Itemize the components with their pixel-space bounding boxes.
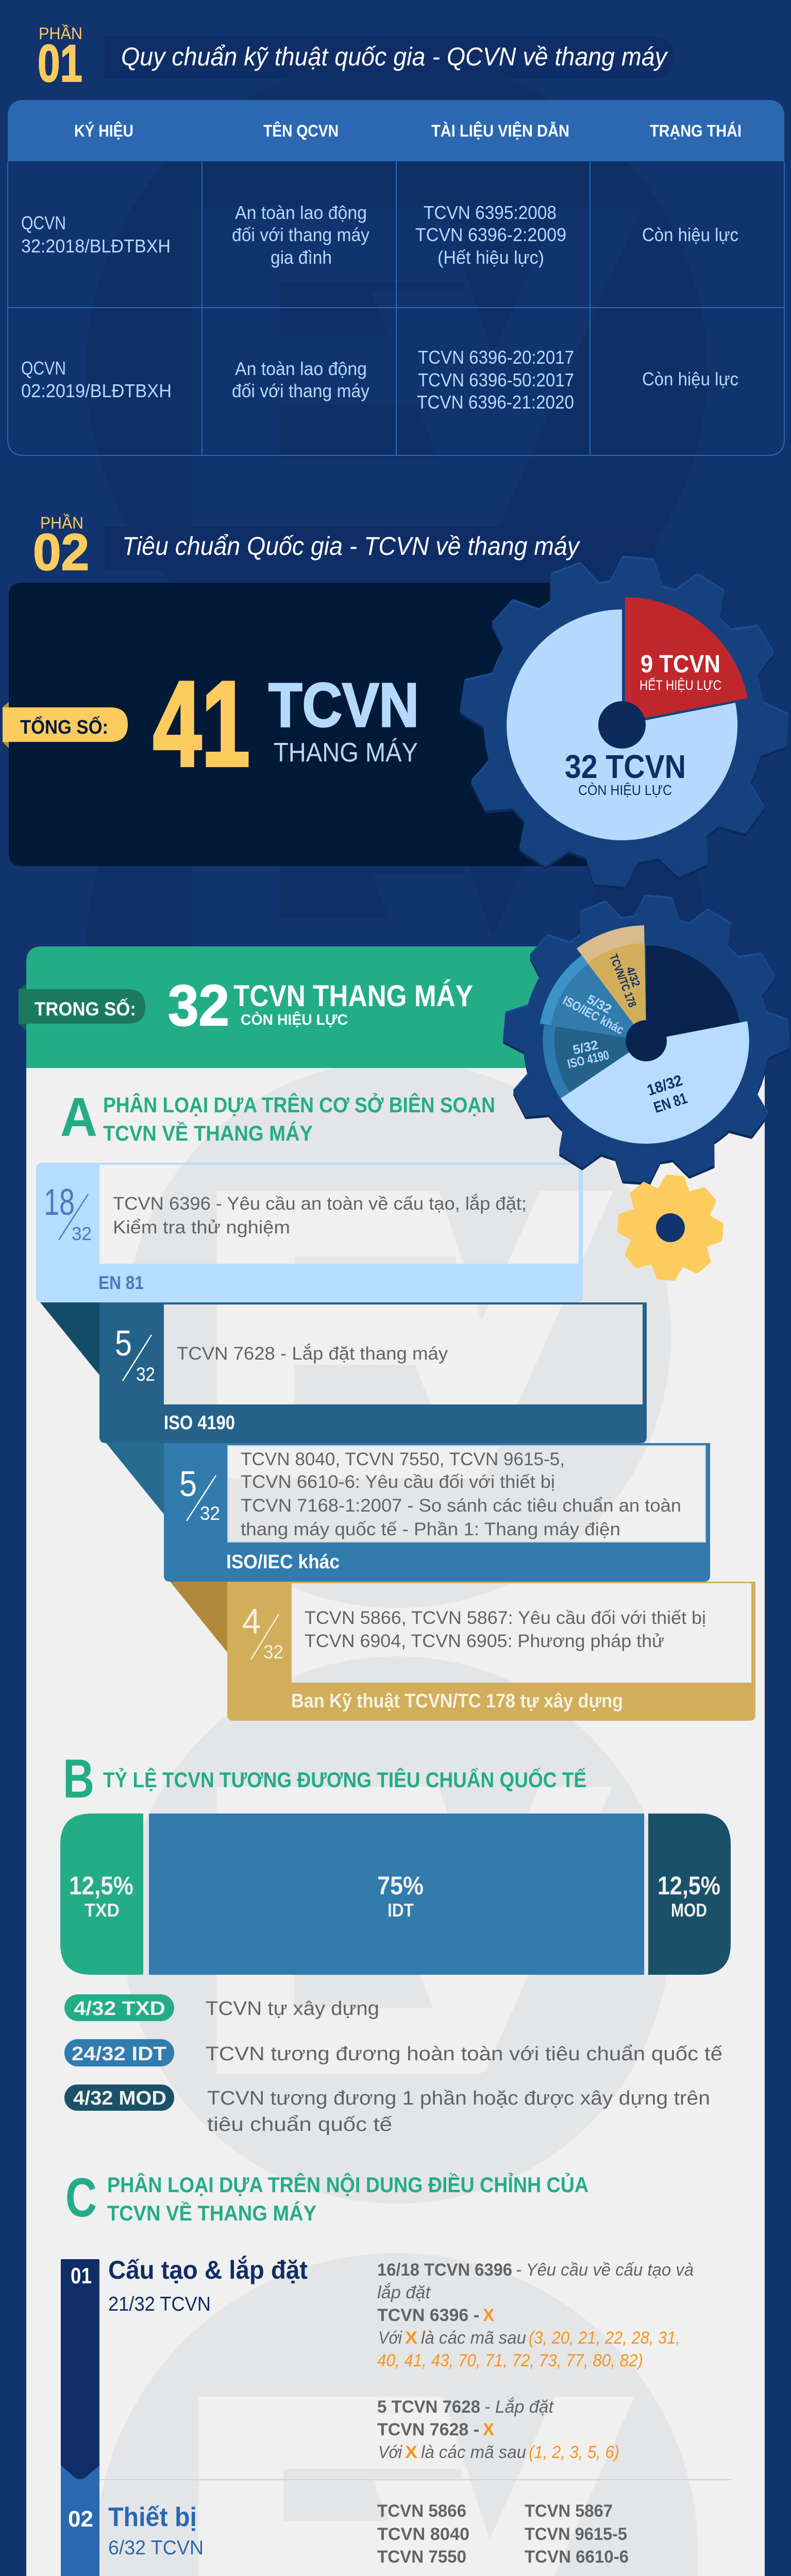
legend: TXD: 4/32 TXD: [74, 1998, 165, 2020]
table header: TÊN QCVN: [263, 122, 339, 140]
text EN 81: Kiểm tra thử nghiệm: [113, 1217, 290, 1238]
gear: 32 TCVN pie: [504, 895, 788, 1184]
fraction 5/32: 32: [200, 1503, 220, 1524]
label: phần 01: 01: [38, 34, 82, 93]
heading C: TCVN VỀ THANG MÁY: [107, 2201, 316, 2225]
row 01 details TCVN 7628: X: [483, 2420, 494, 2439]
panel: light content background: [26, 1068, 765, 2576]
text TC 178: TCVN 5866, TCVN 5867: Yêu cầu đối với thiết bị: [305, 1608, 706, 1628]
watermark: logo top: [86, 59, 708, 681]
table row 2: [21, 347, 738, 413]
row 01: cấu tạo và lắp đặt: [108, 2256, 694, 2462]
row 01 details TCVN 6396: - Yêu cầu về cấu tạo và: [516, 2260, 694, 2280]
legend: IDT: [64, 2039, 722, 2066]
QCVN table: [8, 100, 784, 455]
pie label: 4/32 TCVN/TC 178: 4/32: [624, 965, 643, 989]
table row 2: TCVN 6396-21:2020: [417, 392, 574, 413]
label: TCVN thang máy: THANG MÁY: [274, 738, 418, 768]
heading C: C: [65, 2166, 97, 2228]
table header: TÀI LIỆU VIỆN DẪN: [431, 122, 569, 140]
watermark: light logo 1: [124, 1061, 671, 1608]
row 01 details TCVN 6396: X: [483, 2306, 494, 2325]
text ISO/IEC: TCVN 6610-6: Yêu cầu đối với thiết bị: [241, 1472, 555, 1492]
section 02 heading: [33, 514, 655, 581]
fraction 5/32: 32: [136, 1364, 155, 1385]
table row 2: 02:2019/BLĐTBXH: [21, 380, 172, 401]
label: 32 TCVN: CÒN HIỆU LỰC: [578, 782, 672, 798]
legend: TXD: TCVN tự xây dựng: [206, 1998, 379, 2020]
row 01 details TCVN 6396: [377, 2260, 694, 2370]
row 02 details: TCVN 5866: [377, 2501, 466, 2521]
pie: 9 expired: [625, 597, 748, 722]
pie label: 4/32 TCVN/TC 178: TCVN/TC 178: [607, 953, 639, 1009]
row 02 details: TCVN 7550: [377, 2547, 466, 2567]
ribbon: numbered timeline: [61, 2259, 99, 2576]
table row 2: TCVN 6396-20:2017: [418, 347, 574, 368]
legend: MOD: tiêu chuẩn quốc tế: [207, 2114, 392, 2136]
row 02 details: TCVN 9615-5: [525, 2524, 627, 2544]
label: 32 TCVN: [565, 748, 686, 798]
heading C: [65, 2166, 588, 2228]
text ISO 4190: TCVN 7628 - Lắp đặt thang máy: [177, 1344, 448, 1364]
label: phần 02: 02: [33, 523, 89, 581]
row 01 details TCVN 6396: Với: [378, 2328, 402, 2348]
fraction 18/32: 18: [44, 1182, 75, 1223]
title band 02: Tiêu chuẩn Quốc gia - TCVN về thang máy: [122, 532, 581, 561]
pie label: 18/32 EN 81: [645, 1072, 691, 1117]
segment IDT: IDT: [388, 1900, 414, 1921]
title band 01: Quy chuẩn kỹ thuật quốc gia - QCVN về thang máy: [121, 42, 668, 71]
heading B: B: [63, 1748, 94, 1809]
pie label: 5/32 ISO 4190: 5/32: [571, 1038, 600, 1058]
pie: 5/32 ISO/IEC: [540, 955, 646, 1041]
row 01 details TCVN 6396: 40, 41, 43, 70, 71, 72, 73, 77, 80, 82): [377, 2351, 643, 2370]
legend: IDT: 24/32 IDT: [72, 2043, 166, 2065]
segment MOD: MOD: [671, 1900, 707, 1921]
fraction 5/32: 5: [179, 1464, 197, 1504]
pie label: 18/32 EN 81: EN 81: [652, 1090, 689, 1116]
big number 32: 32: [168, 973, 229, 1038]
row 01 details TCVN 7628: - Lắp đặt: [484, 2397, 554, 2417]
row 01 details TCVN 7628: TCVN 7628 -: [377, 2420, 479, 2439]
label: TCVN thang máy còn hiệu lực: TCVN THANG MÁY: [233, 979, 473, 1013]
row 02: thiết bị: [108, 2501, 629, 2567]
pie label: 5/32 ISO/IEC khác: ISO/IEC khác: [560, 993, 626, 1038]
table row 1: An toàn lao động: [235, 202, 367, 223]
watermark: light logo 3: [95, 2253, 698, 2576]
pie label: 5/32 ISO 4190: [563, 1036, 611, 1072]
label: TCVN thang máy: TCVN: [268, 670, 419, 740]
heading A: [60, 1086, 495, 1148]
label: phần 02: PHẦN: [40, 514, 83, 532]
row 01 title: [108, 2256, 308, 2315]
name ISO 4190: ISO 4190: [164, 1412, 235, 1434]
gear body: [504, 895, 788, 1184]
row 01 details TCVN 6396: X: [405, 2328, 417, 2348]
big number 41: 41: [153, 656, 250, 791]
row 01 details TCVN 7628: 5 TCVN 7628: [377, 2397, 480, 2417]
watermark: logo middle: [86, 641, 708, 1263]
fraction 4/32: 32: [263, 1641, 283, 1663]
pie label: 5/32 ISO/IEC khác: [560, 982, 632, 1038]
gear: 41 TCVN pie: [460, 557, 787, 888]
row 02 details: [377, 2501, 629, 2567]
label: TCVN thang máy còn hiệu lực: [233, 979, 473, 1028]
table row 1: (Hết hiệu lực): [437, 247, 544, 268]
legend: TXD: [64, 1994, 379, 2021]
fraction 5/32: [115, 1323, 155, 1385]
heading A: PHÂN LOẠI DỰA TRÊN CƠ SỞ BIÊN SOẠN: [103, 1092, 495, 1117]
heading A: A: [60, 1086, 97, 1148]
label: 32 TCVN: 32 TCVN: [565, 748, 686, 785]
table row 1: Còn hiệu lực: [642, 224, 738, 245]
table header: [8, 100, 784, 161]
text EN 81: [113, 1194, 527, 1238]
name EN 81: EN 81: [98, 1272, 144, 1293]
section 01 heading: [38, 24, 674, 93]
ribbon: numbered timeline: 01: [71, 2263, 92, 2289]
label: phần 01: PHẦN: [39, 24, 82, 43]
row 02 title: [108, 2502, 204, 2559]
table header: TRẠNG THÁI: [650, 122, 742, 140]
row 02 details: TCVN 8040: [377, 2524, 469, 2544]
watermark: light logo 2: [123, 1656, 670, 2204]
segment MOD: [648, 1814, 731, 1975]
fraction 18/32: 32: [72, 1223, 92, 1244]
fraction 4/32: [242, 1601, 283, 1663]
table row 1: [21, 202, 738, 268]
text TC 178: TCVN 6904, TCVN 6905: Phương pháp thử: [305, 1631, 664, 1651]
text EN 81: TCVN 6396 - Yêu cầu an toàn về cấu tạo, lắp đặt;: [113, 1194, 527, 1214]
pie label: 5/32 ISO/IEC khác: 5/32: [584, 992, 614, 1017]
row 01 title: 21/32 TCVN: [108, 2293, 211, 2315]
legend: MOD: TCVN tương đương 1 phần hoặc được xây dựng trên: [207, 2088, 710, 2109]
segment IDT: 75%: [377, 1871, 424, 1900]
gear body: [460, 557, 787, 888]
row 01 details TCVN 6396: là các mã sau: [421, 2328, 526, 2348]
row 01 details TCVN 7628: Với: [378, 2443, 402, 2462]
row 01 details TCVN 6396: 16/18 TCVN 6396: [377, 2260, 512, 2280]
row 02 title: 6/32 TCVN: [108, 2537, 204, 2559]
title band 02: [105, 527, 655, 570]
table row 1: 32:2018/BLĐTBXH: [21, 235, 171, 257]
table row 2: TCVN 6396-50:2017: [418, 369, 574, 391]
pie: 32 valid: [507, 609, 737, 840]
fraction 5/32: 5: [115, 1323, 132, 1363]
row 01 details TCVN 7628: X: [405, 2443, 417, 2462]
table row 1: QCVN: [21, 212, 66, 233]
panel: total TCVN: [3, 583, 593, 866]
table row 1: TCVN 6396-2:2009: [415, 224, 566, 245]
legend: MOD: 4/32 MOD: [73, 2088, 166, 2109]
text ISO/IEC: TCVN 8040, TCVN 7550, TCVN 9615-5,: [241, 1449, 565, 1469]
row 02 details: TCVN 6610-6: [525, 2547, 629, 2567]
table header: KÝ HIỆU: [74, 122, 133, 140]
segment TXD: TXD: [85, 1900, 120, 1921]
label: TCVN thang máy: [268, 670, 419, 768]
legend: MOD: [64, 2084, 710, 2136]
pie: 5/32 ISO 4190: [543, 1025, 646, 1098]
pie: 4/32 TC 178: [577, 925, 646, 1041]
text ISO/IEC: TCVN 7168-1:2007 - So sánh các tiêu chuẩn an toàn: [241, 1496, 681, 1516]
icon: small gold gear: [619, 1176, 722, 1279]
chart: stacked ratio bar: [60, 1814, 731, 1975]
heading C: PHÂN LOẠI DỰA TRÊN NỘI DUNG ĐIỀU CHỈNH CỦA: [107, 2172, 588, 2197]
row 01 title: Cấu tạo & lắp đặt: [108, 2256, 308, 2284]
card: TCVN/TC 178: [170, 1582, 755, 1721]
table row 2: Còn hiệu lực: [642, 368, 738, 389]
table row 1: gia đình: [271, 247, 332, 268]
row 02 title: Thiết bị: [108, 2502, 197, 2532]
segment TXD: [60, 1814, 143, 1975]
tag: trong số: TRONG SỐ:: [35, 998, 136, 1020]
pie: blank: [646, 945, 740, 1041]
name ISO/IEC khác: ISO/IEC khác: [226, 1551, 340, 1573]
table row 2: QCVN: [21, 358, 66, 379]
pie label: 5/32 ISO 4190: ISO 4190: [566, 1048, 611, 1072]
pie: 18/32 EN 81: [561, 1021, 749, 1144]
label: 9 TCVN: 9 TCVN: [641, 651, 720, 678]
card: EN 81: [36, 1163, 583, 1302]
heading B: [63, 1748, 586, 1809]
name TC 178: Ban Kỹ thuật TCVN/TC 178 tự xây dựng: [291, 1690, 623, 1712]
card: ISO/IEC khác: [106, 1443, 710, 1582]
label: phần 01: [38, 24, 82, 93]
row 01 details TCVN 7628: [377, 2397, 619, 2462]
row 01 details TCVN 7628: (1, 2, 3, 5, 6): [529, 2443, 619, 2462]
tag: tổng số: [3, 702, 128, 748]
title band 01: [105, 36, 674, 79]
label: 9 TCVN: [639, 651, 721, 693]
table row 2: An toàn lao động: [235, 358, 367, 379]
fraction 5/32: [179, 1464, 220, 1524]
pie label: 18/32 EN 81: 18/32: [645, 1072, 684, 1099]
row 01 details TCVN 7628: là các mã sau: [421, 2443, 526, 2462]
heading A: TCVN VỀ THANG MÁY: [103, 1121, 313, 1145]
row 01 details TCVN 6396: (3, 20, 21, 22, 28, 31,: [529, 2328, 680, 2348]
ribbon: numbered timeline: 02: [68, 2506, 93, 2532]
text ISO/IEC: thang máy quốc tế - Phần 1: Thang máy điện: [241, 1519, 620, 1539]
segment IDT: [149, 1814, 644, 1975]
segment MOD: 12,5%: [658, 1871, 720, 1900]
table row 1: TCVN 6395:2008: [424, 202, 557, 223]
table row 2: đối với thang máy: [232, 380, 369, 401]
segment TXD: 12,5%: [69, 1871, 133, 1900]
heading B: TỶ LỆ TCVN TƯƠNG ĐƯƠNG TIÊU CHUẨN QUỐC TẾ: [103, 1767, 586, 1792]
text ISO/IEC: [241, 1449, 681, 1539]
panel: green header 32 TCVN: [19, 946, 546, 1068]
label: 9 TCVN: HẾT HIỆU LỰC: [639, 677, 721, 693]
row 01 details TCVN 6396: TCVN 6396 -: [377, 2306, 479, 2325]
fraction 4/32: 4: [242, 1601, 261, 1641]
legend: IDT: TCVN tương đương hoàn toàn với tiêu chuẩn quốc tế: [206, 2043, 722, 2065]
row 01 details TCVN 6396: lắp đặt: [377, 2283, 431, 2302]
row 02 details: TCVN 5867: [525, 2501, 613, 2521]
pie label: 4/32 TCVN/TC 178: [607, 948, 649, 1009]
tag: tổng số: TỔNG SỐ:: [20, 715, 108, 738]
fraction 18/32: [44, 1182, 92, 1244]
card: ISO 4190: [40, 1302, 647, 1443]
text TC 178: [305, 1608, 706, 1651]
label: TCVN thang máy còn hiệu lực: CÒN HIỆU LỰC: [241, 1011, 348, 1028]
tag: trong số: [19, 984, 145, 1030]
table row 1: đối với thang máy: [232, 224, 369, 245]
